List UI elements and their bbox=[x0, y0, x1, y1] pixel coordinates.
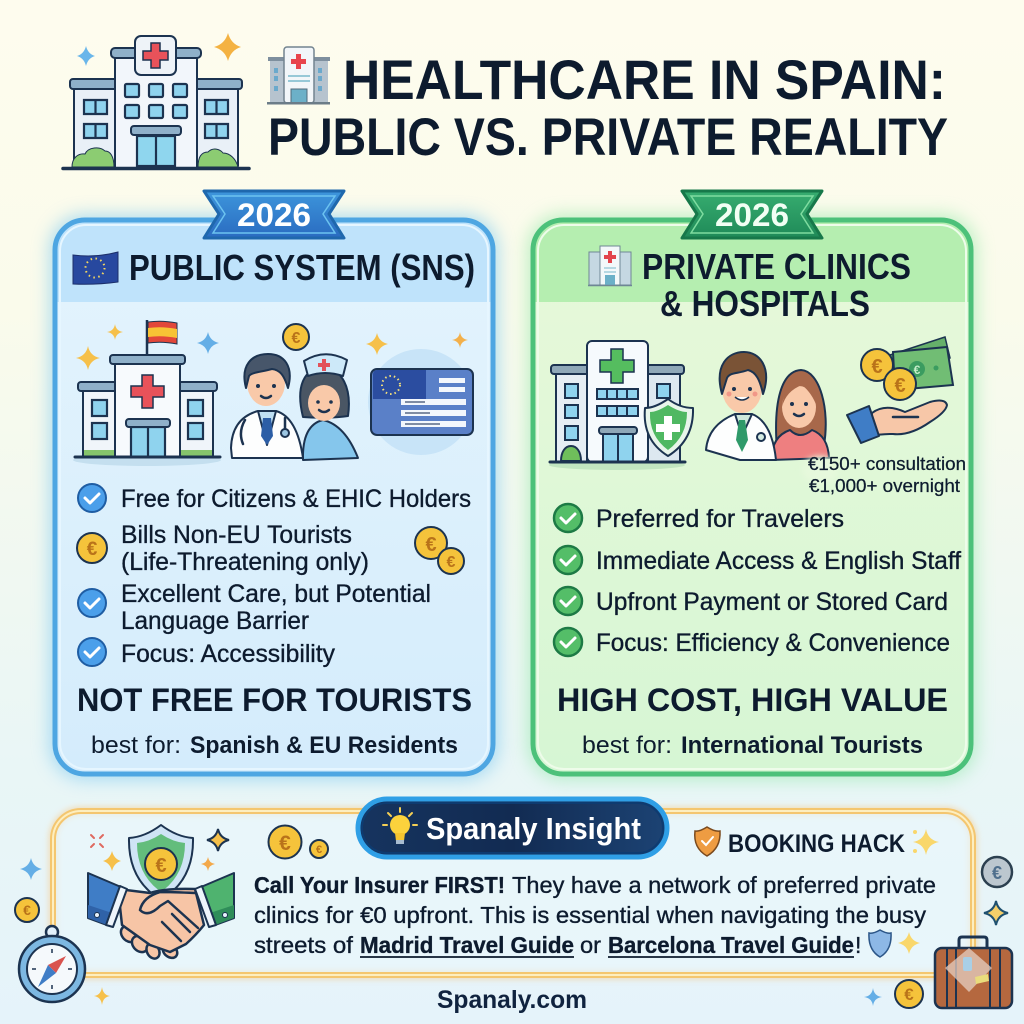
text: website: Spanaly.com bbox=[437, 986, 587, 1014]
text: excellent care bbox=[121, 580, 431, 635]
icon: check bbox=[554, 628, 582, 656]
text: private best for: International Tourists bbox=[681, 732, 923, 759]
icon: woman bbox=[771, 370, 829, 460]
text: private pricing: €150+ consultation bbox=[808, 454, 966, 474]
text: insight body: Call Your Insurer FIRST! bbox=[254, 872, 505, 898]
text: excellent care: Language Barrier bbox=[121, 607, 309, 635]
icon: left coin bbox=[15, 898, 39, 922]
icon: insight coins: € bbox=[316, 844, 322, 856]
icon: right sparkle bbox=[984, 901, 1008, 925]
icon: suitcase bbox=[935, 937, 1012, 1008]
panel: insight frame bbox=[53, 811, 973, 975]
list: public features bbox=[77, 484, 471, 668]
icon: main hospital bbox=[63, 36, 249, 168]
icon: bottom right coin bbox=[895, 980, 923, 1008]
icon: euro coins: € bbox=[447, 554, 456, 571]
icon: euro coin: € bbox=[292, 330, 301, 347]
icon: money and hand: € bbox=[871, 356, 883, 378]
icon: euro coins bbox=[415, 527, 464, 574]
icon: check bbox=[78, 638, 106, 666]
icon: check bbox=[554, 546, 582, 574]
icon: euro coins: € bbox=[425, 534, 437, 556]
icon: light bulb bbox=[383, 808, 417, 844]
text: insight body bbox=[254, 872, 936, 958]
text: public best for: Spanish & EU Residents bbox=[190, 732, 458, 759]
icon: euro bullet: € bbox=[87, 539, 98, 560]
icon: small shield and sparkle bbox=[869, 930, 920, 957]
icon: EU flag bbox=[73, 252, 118, 284]
icon: orange shield bbox=[695, 827, 720, 856]
icon: private heading hospital bbox=[588, 246, 632, 286]
icon: title hospital bbox=[267, 47, 330, 104]
text: bills non-EU tourists bbox=[121, 521, 369, 576]
text: bills non-EU tourists: (Life-Threatening only) bbox=[121, 548, 369, 576]
heading: booking hack: BOOKING HACK bbox=[728, 830, 905, 858]
text: immediate access: Immediate Access & English Staff bbox=[596, 547, 961, 575]
text: insight body: ! bbox=[855, 932, 861, 958]
heading: private clinics bbox=[642, 246, 911, 324]
sparkles: insight illustration bbox=[91, 829, 229, 871]
ribbon: public 2026 bbox=[204, 191, 344, 238]
panel: public system bbox=[50, 191, 498, 779]
text: bills non-EU tourists: Bills Non-EU Tourists bbox=[121, 521, 352, 549]
icon: handshake and shield: € bbox=[155, 855, 167, 877]
icon: grey coin: € bbox=[992, 863, 1002, 883]
icon: gold sparkle bbox=[214, 33, 241, 61]
text: focus efficiency: Focus: Efficiency & Convenience bbox=[596, 629, 950, 657]
text: preferred for travelers: Preferred for Travelers bbox=[596, 505, 844, 533]
text: free for citizens: Free for Citizens & EHIC Holders bbox=[121, 485, 471, 513]
badge: Spanaly Insight bbox=[358, 799, 667, 857]
icon: blue sparkle bbox=[77, 46, 95, 66]
text: insight body: Madrid Travel Guide bbox=[360, 932, 574, 958]
icon: private hospital with shield bbox=[549, 341, 693, 470]
icon: insight coins bbox=[268, 826, 328, 858]
sparkles: public illustration bbox=[76, 324, 468, 370]
icon: compass bbox=[19, 926, 85, 1002]
ribbon: private 2026: 2026 bbox=[715, 197, 789, 233]
title: PUBLIC VS. PRIVATE REALITY bbox=[268, 108, 948, 167]
text: private pricing bbox=[802, 454, 966, 496]
icon: nurse bbox=[300, 354, 358, 460]
heading: public system: PUBLIC SYSTEM (SNS) bbox=[129, 247, 475, 288]
icon: bottom blue sparkle bbox=[864, 988, 882, 1006]
icon: money and hand bbox=[847, 337, 953, 443]
icon: euro coin bbox=[283, 324, 309, 350]
heading: private clinics: & HOSPITALS bbox=[660, 283, 870, 324]
icon: public hospital with flag bbox=[73, 320, 221, 466]
text: insight body: They have a network of preferred private bbox=[512, 872, 936, 898]
icon: check bbox=[554, 504, 582, 532]
text: focus accessibility: Focus: Accessibility bbox=[121, 640, 335, 668]
text: private pricing: €1,000+ overnight bbox=[809, 476, 960, 496]
icon: check bbox=[78, 589, 106, 617]
icon: grey coin bbox=[982, 857, 1012, 887]
list: private features bbox=[554, 504, 961, 657]
icon: left coin: € bbox=[23, 902, 31, 918]
icon: bottom gold sparkle bbox=[94, 987, 110, 1005]
text: public best for: best for: bbox=[91, 732, 181, 759]
icon: doctor bbox=[231, 354, 303, 458]
text: upfront payment: Upfront Payment or Stored Card bbox=[596, 588, 948, 616]
heading: private clinics: PRIVATE CLINICS bbox=[642, 246, 911, 287]
text: private best for: best for: bbox=[582, 732, 672, 759]
icon: check bbox=[554, 587, 582, 615]
icon: left blue sparkle bbox=[20, 858, 42, 880]
icon: money and hand: € bbox=[894, 375, 906, 397]
text: excellent care: Excellent Care, but Potential bbox=[121, 580, 431, 608]
icon: money and hand: € bbox=[914, 363, 921, 377]
icon: check bbox=[78, 484, 106, 512]
text: insight body: Barcelona Travel Guide bbox=[608, 932, 854, 958]
icon: bottom right coin: € bbox=[904, 985, 914, 1004]
text: badge label: Spanaly Insight bbox=[426, 811, 641, 846]
text: insight body: clinics for €0 upfront. This is essential when navigating the busy bbox=[254, 902, 927, 928]
icon: health card bbox=[368, 349, 474, 455]
icon: insight coins: € bbox=[279, 832, 291, 855]
callout: high cost high value: HIGH COST, HIGH VALUE bbox=[557, 682, 948, 718]
callout: not free for tourists: NOT FREE FOR TOURISTS bbox=[77, 682, 472, 718]
text: insight body: or bbox=[580, 932, 601, 958]
panel: private clinics bbox=[528, 191, 976, 779]
icon: handshake and shield bbox=[88, 825, 234, 961]
icon: euro bullet bbox=[77, 533, 107, 563]
icon: private doctor bbox=[706, 352, 776, 460]
ribbon: private 2026 bbox=[682, 191, 822, 238]
icon: booking sparkle bbox=[913, 829, 939, 855]
title bbox=[268, 48, 948, 167]
text: insight body: streets of bbox=[254, 932, 354, 958]
title: HEALTHCARE IN SPAIN: bbox=[343, 48, 946, 111]
ribbon: public 2026: 2026 bbox=[237, 197, 311, 233]
